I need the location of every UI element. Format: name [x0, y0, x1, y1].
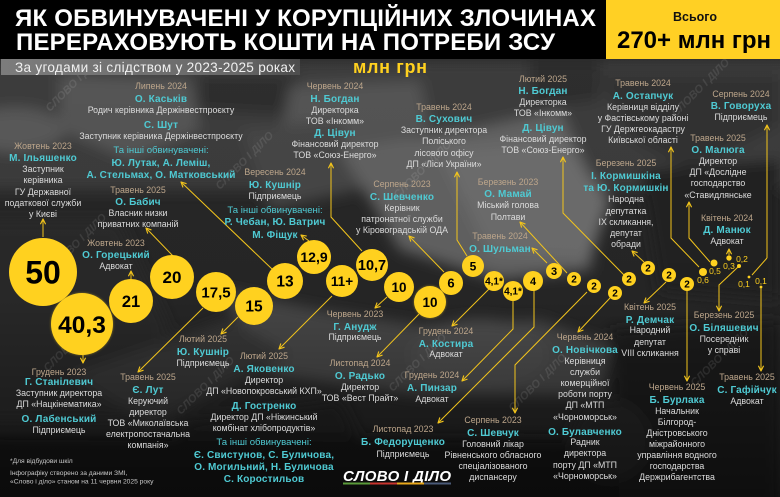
bubble 13 — [267, 263, 303, 299]
callout: Горецький — [82, 238, 150, 271]
callout: Новічкова, Булавченко: Керівниця — [564, 356, 606, 366]
callout: Шульман: О. Шульман — [469, 244, 531, 255]
callout: Горецький: Жовтень 2023 — [87, 238, 145, 248]
callout: Кормишкіни: обради — [611, 239, 641, 249]
bubble 12,9 — [297, 240, 331, 274]
callout: Кормишкіни: депутат — [610, 228, 642, 238]
watermarks: СЛОВО І ДІЛО — [175, 354, 238, 417]
callout: Кормишкіни: Народна — [608, 194, 644, 204]
watermarks: СЛОВО І ДІЛО — [44, 51, 107, 114]
footnote and source — [10, 457, 154, 486]
callout: Каськів, Шут та інші: Та інші обвинувачені: — [113, 145, 209, 156]
callout: Біляшевич: О. Біляшевич — [689, 323, 759, 334]
callout: Радько: Листопад 2024 — [330, 358, 390, 368]
bubble 11+: 11+ — [331, 274, 353, 289]
bubble 5 — [462, 255, 484, 277]
bubble 4,1* — [484, 271, 504, 291]
callout: Ільяшенко: М. Ільяшенко — [9, 153, 77, 164]
callout: Бурлака: Білгород- — [658, 417, 696, 427]
callout: Манюк — [701, 213, 753, 246]
callout: Кушнір 2025: Ю. Кушнір — [177, 347, 229, 358]
callout: Сухович: Заступник директора — [401, 125, 487, 135]
callout: Біляшевич — [689, 310, 759, 355]
callout: Федорущенко: Б. Федорущенко — [361, 437, 445, 448]
callout: Каськів, Шут та інші: А. Стельмах, О. Матковський — [86, 170, 236, 181]
bubble 3 — [546, 263, 562, 279]
bubble 0,6: 0,6 — [697, 275, 709, 285]
callout: Новічкова, Булавченко: О. Булавченко — [548, 427, 622, 438]
callout: Демчак: Квітень 2025 — [624, 302, 676, 312]
callout: Шевчук: Головний лікар — [462, 439, 524, 449]
callout: Шевченко: Серпень 2023 — [373, 179, 431, 189]
watermarks: СЛОВО І ДІЛО — [387, 331, 450, 394]
callout: Бурлака: Дністровського — [646, 428, 708, 438]
callout: Демчак: Народний — [630, 325, 670, 335]
callout: Новічкова, Булавченко: Червень 2024 — [557, 332, 613, 342]
callout: Каськів, Шут та інші: Заступник керівника Держінвестпроєкту — [79, 131, 243, 141]
callout: Яковенко, Гостренко та інші: Лютий 2025 — [240, 351, 288, 361]
callout: Остапчук — [598, 78, 688, 145]
bubble 50 — [9, 238, 77, 306]
callout: Новічкова, Булавченко: комерційної — [561, 378, 610, 388]
callout: Бурлака: Держрибагентства — [639, 472, 715, 482]
callout: Бабич: Травень 2025 — [110, 185, 166, 195]
callout: Шевчук: спеціалізованого — [459, 461, 528, 471]
callout: Богдан, Цівун 2024: Н. Богдан — [310, 94, 360, 105]
callout: Сухович: В. Сухович — [416, 114, 472, 125]
callout: Богдан, Цівун 2025: Н. Богдан — [518, 86, 568, 97]
callout: Новічкова, Булавченко: директора — [564, 448, 606, 458]
callout: Анудж: Підприємець — [328, 332, 382, 342]
callout: Остапчук: у Фастівському районі — [598, 113, 688, 123]
callout: Новічкова, Булавченко: ДП «МТП — [566, 400, 604, 410]
callout: Станілевич, Лабенський: Грудень 2023 — [32, 367, 86, 377]
callout: Мамай: О. Мамай — [484, 189, 532, 200]
bubble 0,1 a: 0,1 — [738, 279, 750, 289]
callout: Шевченко: у Кіровоградській ОДА — [356, 225, 448, 235]
callout: Шевчук: Рівненського обласного — [445, 450, 542, 460]
callout: Малюга: «Ставидлянське — [684, 190, 752, 200]
callout: Малюга: ДП «Дослідне — [690, 167, 747, 177]
callout: Кушнір 2024 та інші: Ю. Кушнір — [249, 180, 301, 191]
bubble 2 f — [662, 268, 676, 282]
watermarks: СЛОВО І ДІЛО — [670, 56, 733, 119]
callout: Кушнір 2024 та інші: Вересень 2024 — [244, 167, 306, 177]
callout: Лут: електропостачальна — [106, 429, 190, 439]
callout: Ільяшенко: Жовтень 2023 — [14, 141, 72, 151]
callout: Богдан, Цівун 2024: ТОВ «Інкомм» — [306, 116, 364, 126]
callout: Остапчук: А. Остапчук — [613, 91, 674, 102]
callout: Кормишкіни — [583, 158, 669, 249]
callout: Бабич — [98, 185, 178, 229]
callout: Лут — [106, 372, 190, 450]
callout: Остапчук: Керівниця відділу — [607, 102, 680, 112]
callout: Біляшевич: Березень 2025 — [694, 310, 754, 320]
bubble 0,5 — [709, 260, 721, 276]
callout: Гафійчук: Адвокат — [730, 396, 764, 406]
callout: Новічкова, Булавченко — [548, 332, 622, 481]
callout: Манюк: Квітень 2024 — [701, 213, 753, 223]
callout: Біляшевич: у справі — [708, 345, 740, 355]
bubble 2 b — [587, 279, 601, 293]
callout: Федорущенко: Підприємець — [376, 449, 430, 459]
bubble 2 f: 2 — [666, 271, 672, 282]
bubble 10,7: 10,7 — [358, 258, 386, 274]
bubble 6: 6 — [447, 276, 455, 290]
callout: Яковенко, Гостренко та інші: С. Коростильов — [224, 474, 304, 485]
bubble 4,1* second: 4,1* — [504, 286, 522, 298]
callout: Богдан, Цівун 2024: Червень 2024 — [307, 81, 363, 91]
callout: Яковенко, Гостренко та інші: А. Яковенко — [233, 364, 295, 375]
callout: Демчак — [621, 302, 679, 358]
subtitle bar: За угодами зі слідством у 2023-2025 роках — [15, 60, 295, 75]
callout: Пинзар: Грудень 2024 — [405, 370, 459, 380]
callout: Гафійчук: Травень 2025 — [719, 372, 775, 382]
bubble 0,2: 0,2 — [736, 254, 748, 264]
bubble 4,1* second — [503, 281, 523, 301]
callout: Ільяшенко: податкової служби — [5, 198, 81, 208]
callout: Малюга: О. Малюга — [691, 145, 745, 156]
callout: Анудж: Г. Анудж — [333, 322, 377, 333]
callout: Богдан, Цівун 2025: ТОВ «Союз-Енерго» — [501, 145, 585, 155]
callout: Костира — [419, 326, 474, 359]
footnote and source: *Для відбудови шкіл — [10, 457, 73, 465]
callout: Костира: Грудень 2024 — [419, 326, 473, 336]
callout: Каськів, Шут та інші: Родич керівника Держінвестпроєкту — [88, 105, 235, 115]
callout: Кушнір 2025: Лютий 2025 — [179, 334, 227, 344]
bubble 40,3: 40,3 — [58, 312, 106, 339]
callout: Ільяшенко: ГУ Державної — [15, 187, 72, 197]
callout: Малюга: Директор — [699, 156, 737, 166]
callout: Станілевич, Лабенський: Г. Станілевич — [25, 377, 93, 388]
bubble 10 second: 10 — [422, 295, 438, 310]
callout: Горецький: О. Горецький — [82, 250, 150, 261]
callout: Каськів, Шут та інші: О. Каськів — [135, 94, 187, 105]
unit label: млн грн — [353, 57, 427, 77]
callout: Демчак: Р. Демчак — [626, 315, 675, 326]
callout: Сухович: лісового офісу — [414, 148, 474, 158]
bubble 20 — [150, 255, 194, 299]
callout: Шевченко — [356, 179, 448, 235]
callout: Ільяшенко: керівника — [23, 175, 63, 185]
bubble 11+ — [326, 265, 358, 297]
callout: Лут: ТОВ «Миколаївська — [108, 418, 189, 428]
callout: Новічкова, Булавченко: служби — [570, 367, 600, 377]
callout: Каськів, Шут та інші: Ю. Лутак, А. Леміш, — [112, 158, 211, 169]
bubble 4: 4 — [530, 276, 537, 288]
callout: Шевчук: Серпень 2023 — [464, 415, 522, 425]
callout: Яковенко, Гостренко та інші: Та інші обвинувачені: — [216, 437, 312, 448]
callout: Федорущенко: Листопад 2023 — [373, 424, 433, 434]
callout: Анудж — [327, 309, 383, 342]
callout: Новічкова, Булавченко: порту ДП «МТП — [553, 460, 617, 470]
callout: Яковенко, Гостренко та інші: О. Могильний, Н. Буличова — [194, 462, 334, 473]
callout: Пинзар: А. Пинзар — [407, 383, 457, 394]
footnote and source: «Слово і діло» станом на 11 червня 2025 року — [10, 478, 154, 486]
callout: Бурлака: міжрайонного — [649, 439, 705, 449]
callout: Станілевич, Лабенський — [16, 367, 102, 435]
callout: Манюк: Адвокат — [710, 236, 744, 246]
callout: Радько: ТОВ «Вест Прайт» — [322, 393, 398, 403]
callout: Говоруха: В. Говоруха — [711, 101, 772, 112]
bubble 0,3 — [723, 255, 735, 271]
bubble 2 e — [641, 261, 655, 275]
title: ЯК ОБВИНУВАЧЕНІ У КОРУПЦІЙНИХ ЗЛОЧИНАХ — [15, 4, 596, 32]
callout: Остапчук: Київської області — [608, 135, 678, 145]
callout: Мамай — [477, 177, 539, 222]
callout: Пинзар: Адвокат — [415, 394, 449, 404]
total box: 270+ млн грн — [617, 27, 771, 54]
callout: Шульман: Травень 2024 — [472, 231, 528, 241]
bubble 15: 15 — [245, 298, 263, 316]
callout: Говоруха: Серпень 2024 — [712, 89, 770, 99]
callout: Каськів, Шут та інші: Липень 2024 — [135, 81, 187, 91]
callout: Федорущенко — [361, 424, 445, 459]
callout: Яковенко, Гостренко та інші: Директор — [245, 375, 283, 385]
callout: Біляшевич: Посередник — [700, 334, 749, 344]
bubble 0,3: 0,3 — [723, 261, 735, 271]
callout: Лут: директор — [129, 407, 167, 417]
callout: Кушнір 2025: Підприємець — [176, 358, 230, 368]
bubble 0,5: 0,5 — [709, 266, 721, 276]
callout: Бурлака: управління водного — [637, 450, 717, 460]
arrows — [43, 125, 767, 423]
callout: Богдан, Цівун 2025: Директорка — [519, 97, 567, 107]
callout: Богдан, Цівун 2025: Лютий 2025 — [519, 74, 567, 84]
callout: Лут: Є. Лут — [132, 385, 164, 396]
bubble 13: 13 — [276, 274, 294, 290]
bubble 2 g: 2 — [684, 280, 690, 291]
callout: Бурлака — [637, 382, 717, 482]
callout: Сухович: ДП «Ліси України» — [406, 159, 482, 169]
bubble 10 — [384, 272, 414, 302]
callout: Станілевич, Лабенський: ДП «Нацкінематика» — [17, 399, 102, 409]
callout: Кормишкіни: І. Кормишкіна — [591, 171, 661, 182]
callout: Сухович — [401, 102, 487, 169]
callout: Гафійчук: С. Гафійчук — [717, 384, 778, 396]
watermarks: СЛОВО І ДІЛО — [392, 138, 455, 201]
callout: Станілевич, Лабенський: Заступник директора — [16, 388, 102, 398]
callout: Малюга: господарство — [691, 178, 745, 188]
bubble 0,6 — [697, 268, 709, 285]
bubble 6 — [439, 271, 463, 295]
callout: Богдан, Цівун 2024: Д. Цівун — [314, 128, 356, 139]
callout: Анудж: Червень 2023 — [327, 309, 383, 319]
callout: Говоруха — [711, 89, 772, 122]
callout: Новічкова, Булавченко: О. Новічкова — [552, 345, 618, 356]
callout: Лут: компанія» — [127, 440, 169, 450]
callout: Бабич: О. Бабич — [115, 196, 161, 208]
bubble 17,5: 17,5 — [201, 284, 231, 302]
bubble 50: 50 — [25, 254, 61, 290]
total box: Всього — [673, 10, 717, 24]
bubble 4,1*: 4,1* — [485, 276, 503, 288]
callout: Новічкова, Булавченко: «Чорноморськ» — [553, 412, 617, 422]
watermarks: СЛОВО І ДІЛО — [42, 311, 105, 374]
bubble 21: 21 — [122, 293, 140, 311]
callout: Богдан, Цівун 2024 — [291, 81, 379, 160]
bubble 21 — [109, 279, 153, 323]
bubble 2 c — [608, 286, 622, 300]
bubble 20: 20 — [163, 268, 181, 287]
callout: Лут: Керуючий — [128, 396, 168, 406]
callout: Яковенко, Гостренко та інші: ДП «Новопокровський КХП» — [206, 386, 322, 396]
callout: Кушнір 2025 — [176, 334, 230, 368]
bubble 4 — [523, 271, 543, 291]
callout: Ільяшенко: Заступник — [22, 164, 64, 174]
callout: Яковенко, Гостренко та інші — [194, 351, 334, 485]
callout: Яковенко, Гостренко та інші: Директор ДП «Ніжинський — [210, 412, 318, 422]
bubble 17,5 — [196, 272, 236, 312]
callout: Богдан, Цівун 2025: ТОВ «Інкомм» — [514, 108, 572, 118]
bubble 10,7 — [356, 249, 388, 281]
watermarks: СЛОВО І ДІЛО — [47, 211, 110, 274]
bubble 12,9: 12,9 — [300, 249, 328, 265]
callout: Бурлака: господарства — [650, 461, 704, 471]
callout: Новічкова, Булавченко: роботи порту — [558, 389, 612, 399]
logo: Слово і діло: СЛОВО І ДІЛО — [343, 468, 451, 485]
callout: Кушнір 2024 та інші: М. Фіщук — [252, 230, 299, 241]
callout: Говоруха: Підприємець — [714, 112, 768, 122]
bubble 15 — [235, 287, 273, 325]
callout: Сухович: Поліського — [422, 136, 466, 146]
callout: Кушнір 2024 та інші: Та інші обвинувачені: — [227, 205, 323, 216]
callout: Шевчук: С. Шевчук — [467, 428, 520, 439]
bubble 2 b: 2 — [591, 282, 597, 293]
callout: Радько: О. Радько — [335, 371, 385, 382]
watermarks: СЛОВО І ДІЛО — [507, 351, 570, 414]
bubble 2 a — [567, 272, 581, 286]
title: ПЕРЕРАХОВУЮТЬ КОШТИ НА ПОТРЕБИ ЗСУ — [16, 29, 556, 56]
callout: Ільяшенко — [5, 141, 81, 219]
bubble 0,2 — [736, 254, 748, 268]
callout: Каськів, Шут та інші: С. Шут — [144, 120, 178, 131]
total box — [606, 0, 780, 59]
callout: Остапчук: ГУ Держгеокадастру — [601, 124, 685, 134]
callout: Каськів, Шут та інші — [79, 81, 243, 181]
callout: Кушнір 2024 та інші: Підприємець — [248, 191, 302, 201]
header: title bar — [0, 0, 606, 59]
callout: Пинзар — [405, 370, 459, 404]
callout: Гафійчук — [717, 372, 778, 406]
callout: Богдан, Цівун 2025: Д. Цівун — [522, 123, 564, 134]
callout: Радько: Директор — [341, 382, 379, 392]
title — [15, 4, 596, 56]
callout: Яковенко, Гостренко та інші: комбінат хлібопродуктів» — [213, 423, 315, 433]
callout: Шевченко: С. Шевченко — [370, 192, 434, 203]
callout: Новічкова, Булавченко: Радник — [570, 437, 600, 447]
callout: Станілевич, Лабенський: Підприємець — [32, 425, 86, 435]
callout: Кушнір 2024 та інші: Р. Чебан, Ю. Ватрич — [225, 216, 326, 228]
bubble 2 c: 2 — [612, 289, 618, 300]
callout: Малюга: Травень 2025 — [690, 133, 746, 143]
callout: Шевченко: Керівник — [384, 203, 420, 213]
callout: Костира: Адвокат — [429, 349, 463, 359]
callout: Мамай: Полтави — [491, 212, 525, 222]
callout: Новічкова, Булавченко: «Чорноморськ» — [553, 471, 617, 481]
callout: Бурлака: Начальник — [655, 406, 699, 416]
callout: Малюга — [684, 133, 752, 200]
callout: Яковенко, Гостренко та інші: Д. Гостренко — [232, 401, 296, 412]
bubble 2 d — [622, 272, 636, 286]
callout: Кормишкіни: та Ю. Кормишкін — [583, 183, 669, 194]
bubble 10 second — [414, 286, 446, 318]
callout: Кормишкіни: Березень 2025 — [596, 158, 656, 168]
watermarks: СЛОВО І ДІЛО — [689, 326, 752, 389]
footnote and source: Інфографіку створено за даними ЗМІ, — [10, 469, 128, 477]
callout: Сухович: Травень 2024 — [416, 102, 472, 112]
bubble 2 a: 2 — [571, 275, 577, 286]
callout: Демчак: депутат — [634, 337, 666, 347]
callout: Станілевич, Лабенський: О. Лабенський — [22, 413, 96, 425]
callout: Шульман — [469, 231, 531, 255]
callout: Яковенко, Гостренко та інші: Є. Свистунов, С. Буличова, — [194, 450, 334, 461]
watermarks — [42, 51, 752, 417]
bubble 2 g — [680, 277, 694, 291]
callout: Остапчук: Травень 2024 — [615, 78, 671, 88]
callout: Богдан, Цівун 2024: Директорка — [311, 105, 359, 115]
callout: Ільяшенко: у Києві — [29, 209, 57, 219]
callout: Лут: Травень 2025 — [120, 372, 176, 382]
bubble chart: amounts — [9, 238, 767, 355]
callout: Богдан, Цівун 2025 — [499, 74, 587, 155]
callout: Бурлака: Червень 2025 — [649, 382, 705, 392]
bubble 3: 3 — [551, 266, 557, 278]
callout: Кормишкіни: депутатка — [606, 206, 646, 216]
callout: Радько — [322, 358, 398, 403]
callout: Мамай: Міський голова — [477, 200, 539, 210]
callout: Манюк: Д. Манюк — [703, 225, 752, 236]
callout: Кормишкіни: IX скликання, — [598, 217, 654, 227]
callout: Бурлака: Б. Бурлака — [649, 395, 705, 406]
watermarks: СЛОВО І ДІЛО — [214, 129, 277, 192]
callout: Богдан, Цівун 2025: Фінансовий директор — [499, 134, 587, 144]
callout: Костира: А. Костира — [419, 339, 474, 350]
bubble 2 e: 2 — [645, 264, 651, 275]
bubble 0,1 b: 0,1 — [755, 276, 767, 286]
callout: Богдан, Цівун 2024: ТОВ «Союз-Енерго» — [293, 150, 377, 160]
bubble 10: 10 — [391, 280, 407, 295]
bubble 2 d: 2 — [626, 275, 632, 286]
callout: Шевчук: диспансеру — [469, 472, 517, 482]
callout: Богдан, Цівун 2024: Фінансовий директор — [291, 139, 379, 149]
callout: Бабич: Власник низки — [109, 208, 168, 218]
callout: Шевченко: патронатної служби — [361, 214, 443, 224]
callout: Мамай: Березень 2023 — [478, 177, 538, 187]
bubble 40,3 — [51, 293, 113, 355]
callout: Шевчук — [445, 415, 542, 482]
bubble 5: 5 — [470, 260, 477, 274]
callout: Демчак: VIII скликання — [621, 348, 679, 358]
callout: Бабич: приватних компаній — [98, 219, 178, 229]
callout: Кушнір 2024 та інші — [225, 167, 326, 241]
callout: Горецький: Адвокат — [99, 261, 133, 271]
